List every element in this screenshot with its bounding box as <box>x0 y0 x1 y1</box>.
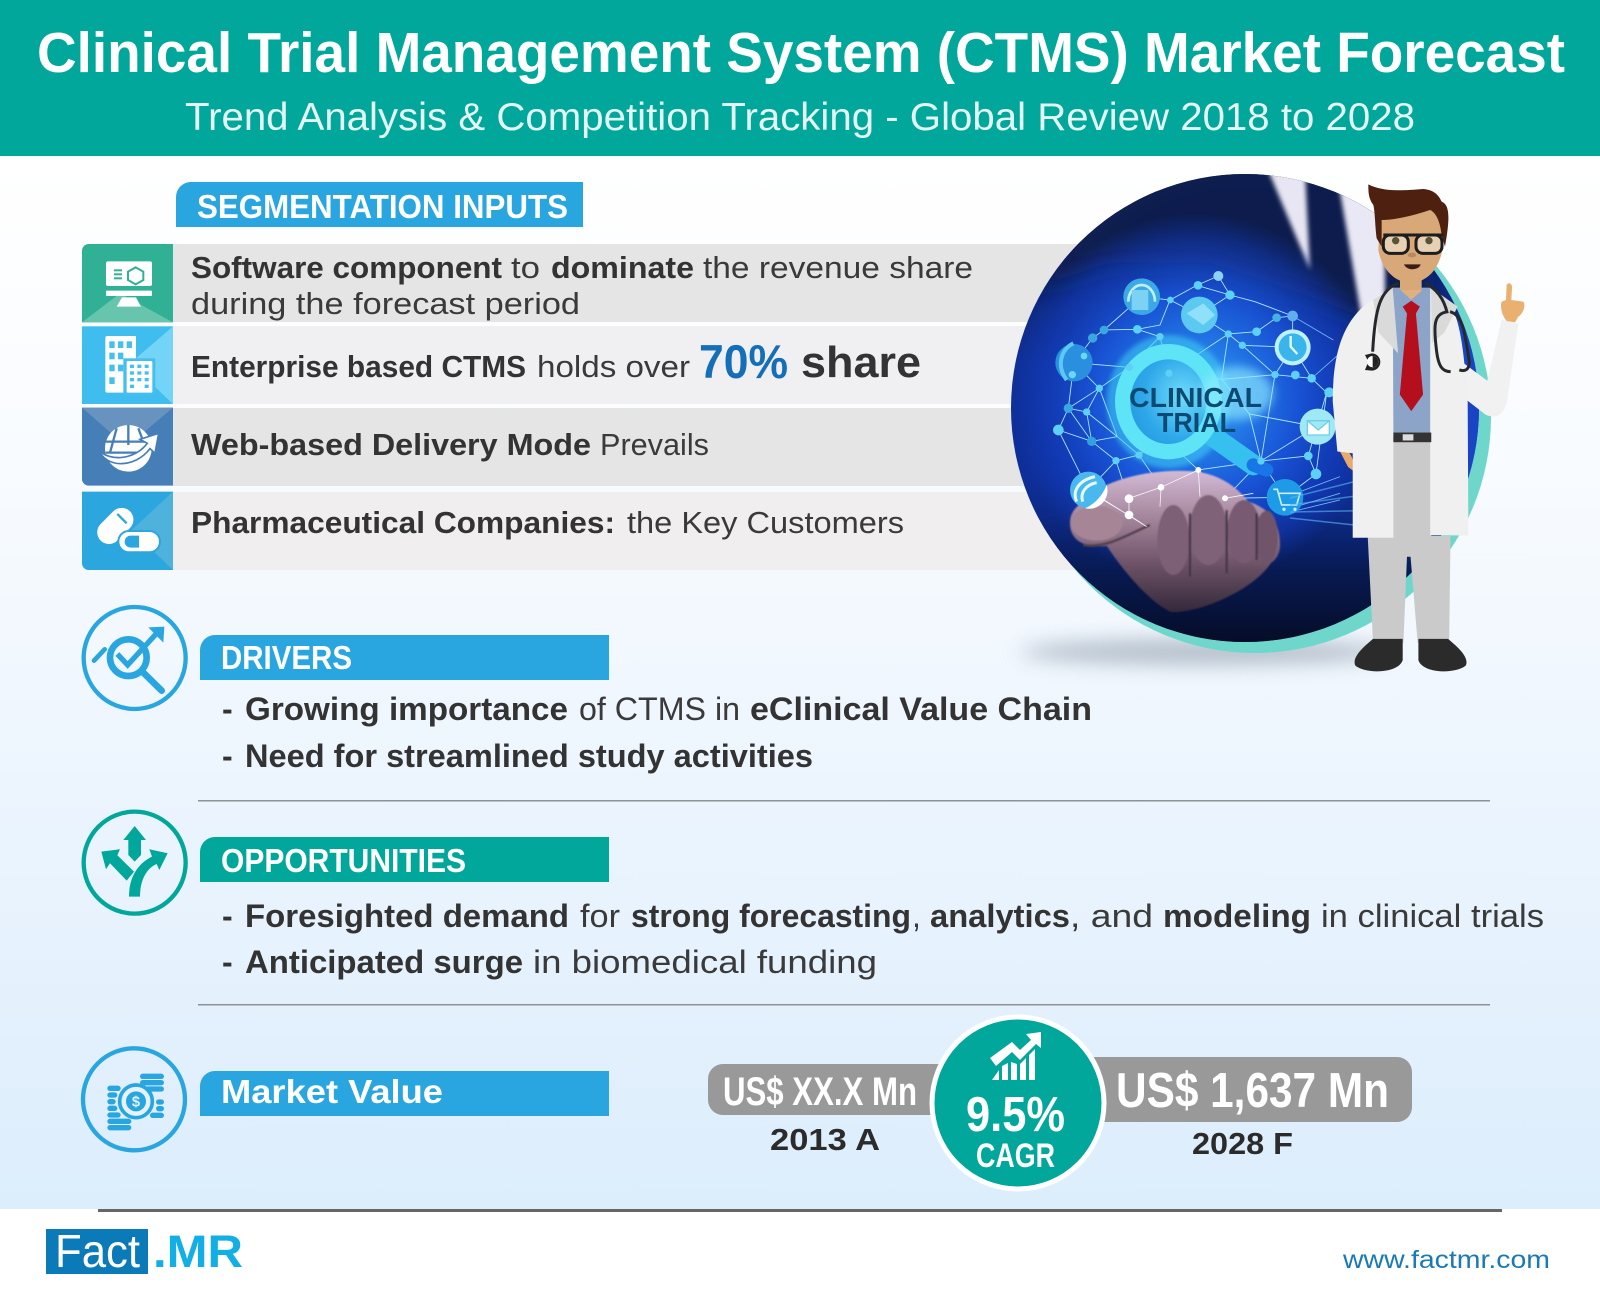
text: opportunity 2: in biomedical funding <box>533 944 877 980</box>
nodes <box>1053 271 1334 479</box>
logo: Fact.MR <box>46 1225 243 1277</box>
neck <box>1402 277 1421 300</box>
heading: opportunities <box>200 837 609 882</box>
value: 2028: US$ 1,637 Mn <box>1116 1064 1389 1118</box>
heading: drivers <box>200 635 609 680</box>
glasses <box>1383 235 1443 253</box>
badge: CAGR: CAGR <box>976 1137 1055 1175</box>
text: software component: dominate <box>551 250 694 285</box>
mouth <box>1404 264 1421 269</box>
title: Clinical Trial Management System (CTMS) Market Forecast <box>37 21 1565 85</box>
belt <box>1393 433 1431 442</box>
text: opportunity 1: in clinical trials <box>1321 898 1544 934</box>
heading: opportunities: OPPORTUNITIES <box>221 842 466 879</box>
text: software component: Software component <box>191 250 502 285</box>
photo circle: clinical trial network <box>1005 160 1491 655</box>
text: opportunity 1: , <box>912 898 921 934</box>
heading: segmentation inputs: SEGMENTATION INPUTS <box>197 188 568 225</box>
text: driver 2: - <box>222 738 233 774</box>
icon: market value coins <box>83 1048 185 1150</box>
shirt <box>1393 288 1431 436</box>
text: driver 1: - <box>222 691 233 727</box>
header banner <box>0 0 1600 156</box>
finger hand <box>1501 283 1524 322</box>
text: web-based delivery: Web-based Delivery Mode <box>191 427 591 462</box>
text: driver 1: of CTMS in <box>579 691 740 727</box>
icon: enterprise buildings <box>82 326 173 404</box>
text: opportunity 1: modeling <box>1163 898 1311 934</box>
website: www.factmr.com <box>1342 1246 1550 1274</box>
text: opportunity 1: analytics <box>930 898 1070 934</box>
value: 2013: US$ XX.X Mn <box>723 1070 917 1114</box>
text: opportunity 2: Anticipated surge <box>245 944 523 980</box>
subtitle: Trend Analysis & Competition Tracking - Global Review 2018 to 2028 <box>185 96 1415 139</box>
badge: CAGR: 9.5% <box>966 1088 1065 1142</box>
text: opportunity 1: , and <box>1070 898 1153 934</box>
right arm <box>1464 319 1518 417</box>
value: 2028 <box>1080 1057 1412 1161</box>
photo circle: clinical trial network: TRIAL <box>1157 407 1236 438</box>
text: enterprise share: holds over <box>537 349 690 384</box>
magnifier <box>1118 347 1218 457</box>
heading: market value: Market Value <box>221 1073 443 1110</box>
text: opportunity 1: for <box>580 898 620 934</box>
logo: Fact.MR: Fact <box>55 1225 140 1277</box>
text: opportunity 1: Foresighted demand <box>245 898 569 934</box>
logo: Fact.MR: .MR <box>153 1226 243 1277</box>
icon: pills <box>82 492 173 570</box>
hair <box>1368 184 1448 247</box>
network <box>1053 271 1340 515</box>
text: software component: during the forecast period <box>191 286 580 321</box>
text: driver 2: Need for streamlined study activities <box>245 738 813 774</box>
text: driver 1: Growing importance <box>245 691 568 727</box>
text: opportunity 1: - <box>222 898 233 934</box>
icon: growth chart <box>990 1032 1041 1080</box>
text: opportunity 1 <box>222 898 1544 934</box>
nose <box>1408 253 1416 257</box>
text: opportunity 2: - <box>222 944 233 980</box>
badge: CAGR <box>932 1017 1104 1189</box>
clinical trial label: CLINICAL <box>1129 382 1262 413</box>
tie <box>1400 301 1423 411</box>
icon: software monitor <box>82 244 173 322</box>
shoes <box>1355 639 1467 671</box>
panel: segmentation row backgrounds <box>173 244 1103 570</box>
left hand <box>1339 449 1355 472</box>
text: enterprise share: 70% <box>699 335 788 388</box>
text: pharmaceutical companies: Pharmaceutical Companies: <box>191 505 615 540</box>
text: enterprise share <box>191 335 921 388</box>
coat <box>1333 286 1393 538</box>
text: opportunity 2 <box>222 944 877 980</box>
text: software component <box>191 250 973 321</box>
head <box>1378 203 1443 283</box>
text: pharmaceutical companies <box>191 505 904 540</box>
heading: drivers: DRIVERS <box>221 639 352 676</box>
value: 2028: 2028 F <box>1192 1126 1293 1161</box>
heading: market value <box>200 1071 609 1116</box>
text: enterprise share: Enterprise based CTMS <box>191 349 526 384</box>
stethoscope <box>1373 283 1469 372</box>
text: software component: to <box>511 250 540 285</box>
text: driver 1 <box>222 691 1092 727</box>
hand <box>1070 467 1280 612</box>
value: 2013: 2013 A <box>770 1122 880 1157</box>
text: pharmaceutical companies: the Key Customers <box>627 505 904 540</box>
suit upper <box>1040 174 1435 325</box>
text: web-based delivery: Prevails <box>600 427 709 462</box>
icon: globe with arrow <box>82 408 173 486</box>
round app icons <box>1055 278 1336 516</box>
trousers <box>1368 441 1451 643</box>
value: 2013 <box>708 1064 960 1157</box>
right blue stripes <box>1290 481 1353 526</box>
icon: market value coins: $ <box>132 1095 140 1111</box>
text: driver 1: eClinical Value Chain <box>750 691 1092 727</box>
text: software component: the revenue share <box>703 250 973 285</box>
doctor illustration <box>1333 184 1524 671</box>
text: enterprise share: share <box>801 338 921 387</box>
icon: drivers <box>84 607 186 709</box>
shadow under photo <box>1020 639 1390 665</box>
text: opportunity 1: strong forecasting <box>631 898 911 934</box>
icon: opportunities <box>84 812 186 914</box>
